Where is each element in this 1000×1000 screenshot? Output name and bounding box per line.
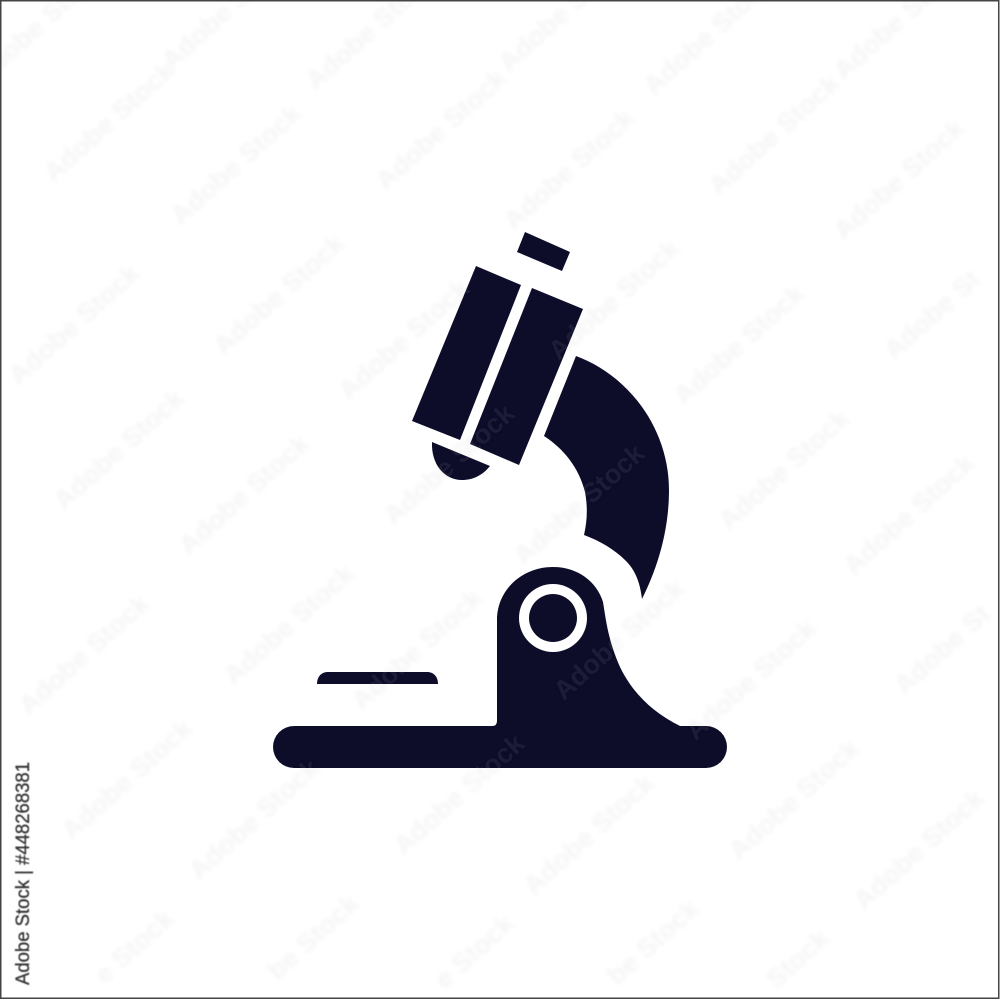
watermark: faint white text layer: Adobe Stock <box>13 587 156 721</box>
watermark: blurred halo layer: Adobe Stock <box>173 427 316 561</box>
watermark: faint white text layer: Adobe Stock <box>48 382 191 516</box>
icon part: right tube segment <box>470 288 583 465</box>
icon part: objective lens <box>432 442 490 480</box>
watermark: blurred halo layer: Stock <box>760 923 836 995</box>
watermark: faint white text layer: Adobe Stock <box>848 782 991 916</box>
watermark: blurred halo layer: Adobe Stock <box>548 572 691 706</box>
watermark: faint white text layer: Adobe Stock <box>723 732 866 866</box>
watermark: faint white text layer: Adobe Stock <box>498 102 641 236</box>
stock id side text: Adobe Stock | #448268381 <box>13 762 34 985</box>
watermark: blurred halo layer: Adobe Stock <box>13 587 156 721</box>
watermark: blurred halo layer: Adobe Stock <box>680 612 823 746</box>
watermark: faint white text layer: Adobe Stock <box>3 257 146 391</box>
watermark: faint white text layer: Adobe Stock <box>38 54 181 188</box>
watermark: blurred halo layer: Adobe Stock <box>165 97 308 231</box>
watermark: blurred halo layer: Adobe Stock <box>183 752 326 886</box>
watermark: blurred halo layer: Adobe Stock <box>498 102 641 236</box>
watermark: faint white text layer: be Stock <box>261 888 366 986</box>
icon part: curved arm <box>544 356 669 599</box>
watermark: faint white text layer: Adobe Stock <box>378 397 521 531</box>
watermark: blurred halo layer: Adobe Stock <box>218 557 361 691</box>
watermark: blurred halo layer: Adobe Stock <box>346 582 489 716</box>
watermark: faint white text layer: Adobe Stock <box>56 712 199 846</box>
watermark: faint white text layer: Adobe Stock <box>388 727 531 861</box>
watermark: faint white text layer: Adobe Stock <box>218 557 361 691</box>
icon part: pivot ring <box>519 584 587 652</box>
watermark: faint white text layer: Adobe Stock <box>165 97 308 231</box>
watermark: blurred halo layer: Adobe Stock <box>518 767 661 901</box>
watermark: faint white text layer: Adobe Stock <box>370 62 513 196</box>
icon part: left tube segment <box>412 266 521 440</box>
watermark: faint white text layer: e Stock <box>429 908 521 995</box>
watermark: faint white text layer: Adobe St <box>878 264 986 365</box>
icon: microscope <box>273 232 727 768</box>
watermark: blurred halo layer: Adobe Stock <box>848 782 991 916</box>
watermark: blurred halo layer: Adobe St <box>888 599 996 700</box>
watermark: blurred halo layer: Adobe Stock <box>208 227 351 361</box>
watermark: faint white text layer: Adobe Stock <box>346 582 489 716</box>
watermark: faint white text layer: Adobe Stock <box>680 612 823 746</box>
watermark: faint white text layer: Adobe Stock <box>173 427 316 561</box>
watermark: faint white text layer: Adobe Stock <box>703 67 846 201</box>
icon part: stand and base <box>273 567 727 768</box>
watermark: faint white text layer: Adobe Stock <box>543 232 686 366</box>
watermark: blurred halo layer: e Stock <box>429 908 521 995</box>
watermark: faint white text layer: Adobe Stock <box>838 447 981 581</box>
watermark: faint white text layer: Stock <box>760 923 836 995</box>
watermark: blurred halo layer: Adobe Stock <box>723 732 866 866</box>
watermark: blurred halo layer: Adobe Stock <box>713 402 856 536</box>
watermark: blurred halo layer: Adobe Stock <box>38 54 181 188</box>
watermark: blurred halo layer: Adobe Stock <box>838 447 981 581</box>
icon part: eyepiece cap <box>517 232 570 271</box>
watermark: faint white text layer: Adobe Stock <box>208 227 351 361</box>
watermark: blurred halo layer: e Stock <box>89 903 181 990</box>
watermark: faint white text layer: be Stock <box>601 893 706 991</box>
watermark: blurred halo layer: Adobe St <box>878 264 986 365</box>
watermark: faint white text layer: Adobe Stock <box>333 272 476 406</box>
watermark: faint white text layer: Adobe Stock <box>828 112 971 246</box>
watermark: blurred halo layer: be Stock <box>601 893 706 991</box>
watermark: blurred halo layer: Adobe Stock <box>703 67 846 201</box>
watermark: blurred halo layer: Adobe Stock <box>828 112 971 246</box>
icon part: specimen slide <box>317 672 438 684</box>
watermark: blurred halo layer: Adobe Stock <box>3 257 146 391</box>
watermark: blurred halo layer: Adobe Stock <box>508 437 651 571</box>
watermark: faint white text layer: Adobe Stock <box>183 752 326 886</box>
watermark: blurred halo layer: Adobe Stock <box>388 727 531 861</box>
watermark: faint white text layer: Adobe Stock <box>518 767 661 901</box>
watermark: blurred halo layer: Adobe Stock <box>370 62 513 196</box>
watermark: blurred halo layer: Adobe Stock <box>668 277 811 411</box>
watermark: blurred halo layer: Adobe Stock <box>333 272 476 406</box>
watermark: faint white text layer: Adobe Stock <box>713 402 856 536</box>
watermark: blurred halo layer: Adobe Stock <box>543 232 686 366</box>
watermark: faint white text layer: Adobe Stock <box>508 437 651 571</box>
watermark: faint white text layer: Adobe Stock <box>668 277 811 411</box>
watermark: blurred halo layer: Adobe Stock <box>378 397 521 531</box>
watermark: faint white text layer: Adobe Stock <box>548 572 691 706</box>
watermark: blurred halo layer: be Stock <box>261 888 366 986</box>
watermark: faint white text layer: e Stock <box>89 903 181 990</box>
watermark: blurred halo layer: Adobe Stock <box>56 712 199 846</box>
watermark: blurred halo layer: Adobe Stock <box>48 382 191 516</box>
watermark: faint white text layer: Adobe St <box>888 599 996 700</box>
